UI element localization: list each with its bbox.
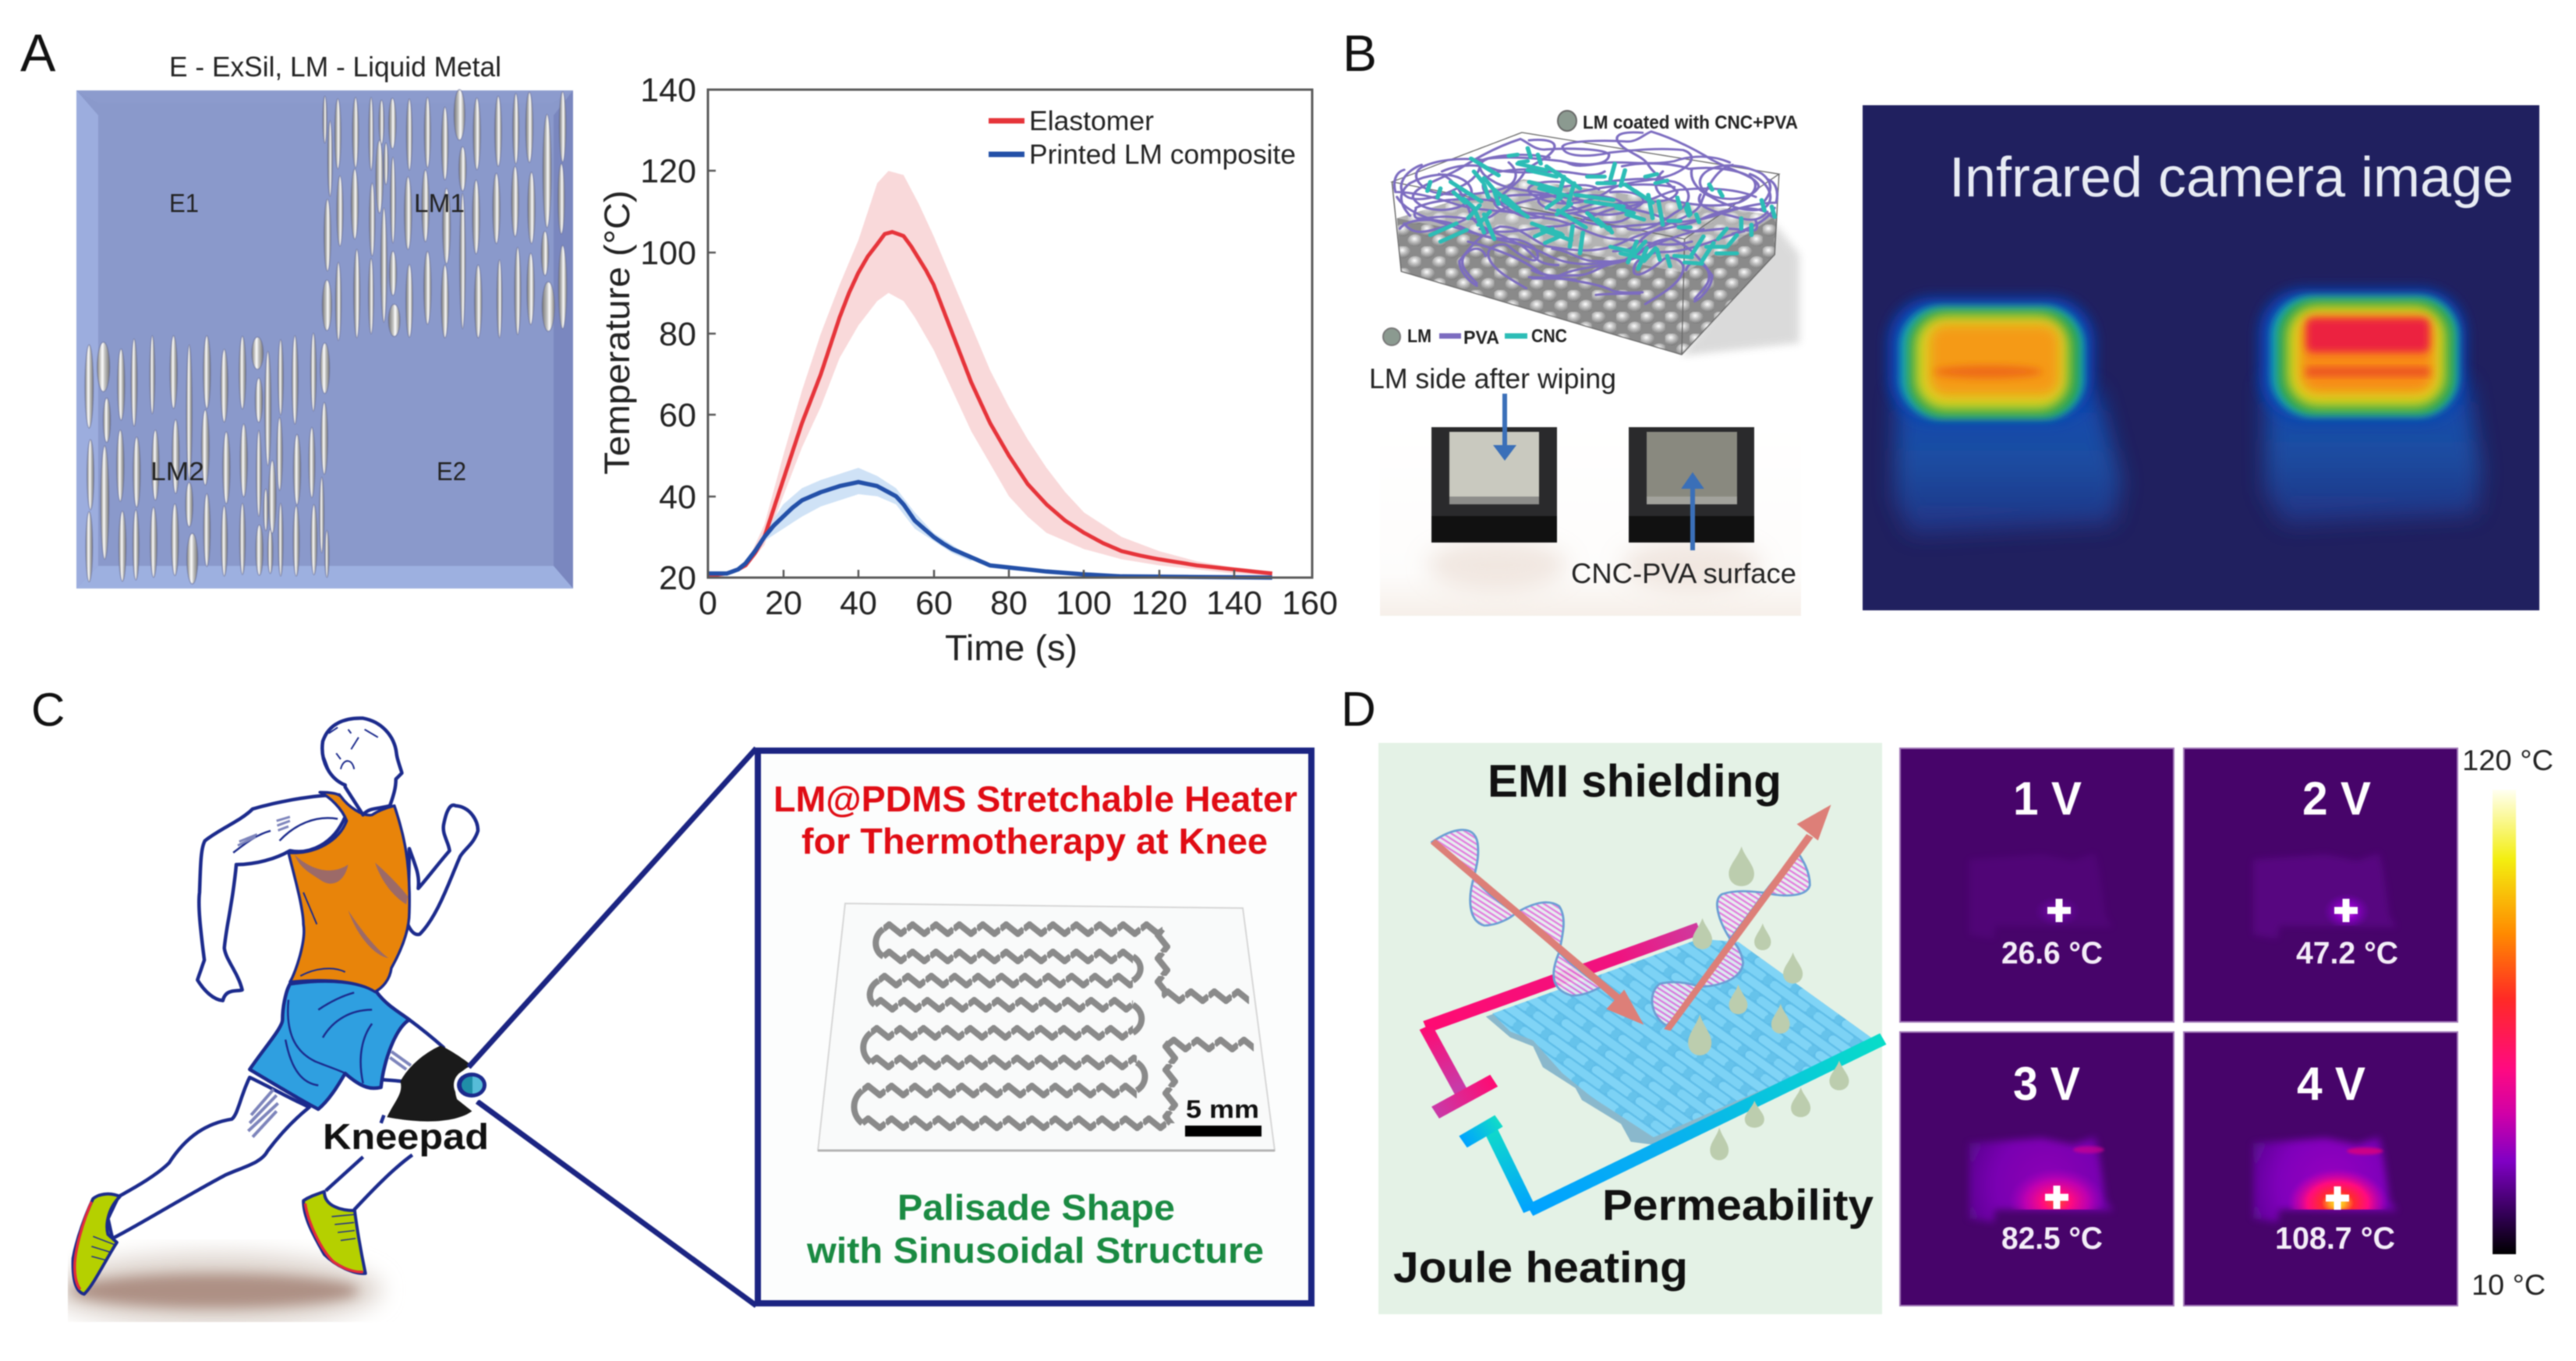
sample: CNC-PVA surface — [1629, 427, 1754, 543]
panel D: thermal image 4 V: 4 V — [2297, 1058, 2365, 1110]
EM waves — [1432, 830, 1810, 1026]
panel letter C: C — [31, 684, 65, 736]
panel letter B: B — [1343, 24, 1377, 82]
label: Joule heating: Joule heating — [1393, 1243, 1688, 1292]
left arm — [197, 795, 345, 1001]
LM2 liquid metal grains — [85, 333, 330, 584]
panel letter A: A — [20, 23, 56, 83]
panel D: thermal image 1 V: 1 V — [2013, 772, 2082, 825]
chart legend: Printed LM composite — [1029, 140, 1296, 170]
y axis numbers: 120 — [640, 153, 696, 190]
x axis numbers — [699, 585, 1338, 622]
panel D: thermal image 2 V: 47.2 °C — [2296, 936, 2398, 970]
panel C: heater callout box — [758, 751, 1311, 1303]
label LM1: LM1 — [414, 189, 465, 217]
material key: CNC — [1531, 326, 1567, 347]
heading: stretchable heater — [773, 779, 1297, 861]
material key — [1383, 326, 1567, 348]
y axis numbers: 140 — [640, 72, 696, 109]
photo: serpentine heater on glass — [818, 903, 1275, 1151]
panel D: thermal image 3 V — [1900, 1032, 2174, 1306]
head — [322, 718, 402, 815]
water droplets — [1688, 847, 1849, 1160]
panel A: temperature versus time line chart — [597, 72, 1338, 668]
right hot spot — [2259, 288, 2482, 524]
printed LM composite curve — [708, 482, 1272, 578]
x axis numbers: 0 — [699, 585, 717, 622]
red shaded band — [745, 171, 1272, 575]
heading: stretchable heater: LM@PDMS Stretchable Heater — [773, 779, 1297, 819]
icon: coated LM bead — [1558, 111, 1576, 131]
panel C: zoom callout lines — [469, 748, 756, 1306]
caption: palisade shape: with Sinusoidal Structure — [806, 1230, 1264, 1271]
scale bar: 5 mm — [1186, 1095, 1259, 1123]
thigh hatch — [248, 1052, 411, 1137]
panel D: thermal image 2 V — [2184, 748, 2457, 1022]
temperature colour bar — [2462, 744, 2553, 1301]
y axis numbers: 20 — [659, 560, 696, 597]
heading: stretchable heater: for Thermotherapy at Knee — [801, 821, 1268, 861]
icon: knee heater spot — [454, 1069, 490, 1101]
thigh — [381, 1020, 444, 1081]
heading: infrared camera image: Infrared camera image — [1949, 147, 2514, 209]
panel D: thermal image 4 V: 108.7 °C — [2275, 1221, 2395, 1256]
label: LM coated with CNC+PVA: LM coated with CNC+PVA — [1583, 112, 1798, 133]
panel D: EMI shielding schematic — [1378, 743, 1883, 1314]
panel B: infrared camera image — [1863, 105, 2539, 610]
label LM2: LM2 — [150, 457, 204, 486]
rear shoe — [73, 1194, 120, 1294]
panel A: material layout square — [76, 51, 573, 589]
x axis title: Time (s) — [945, 627, 1077, 668]
sample: LM side — [1431, 427, 1557, 543]
front shoe — [303, 1192, 366, 1274]
ground shadow — [47, 1253, 382, 1327]
x axis numbers: 40 — [840, 585, 877, 622]
panel letter D: D — [1341, 683, 1376, 737]
panel D: thermal image 2 V: 2 V — [2302, 772, 2371, 825]
x axis numbers: 80 — [990, 585, 1028, 622]
label: colour bar minimum: 10 °C — [2472, 1269, 2546, 1301]
x axis numbers: 20 — [765, 585, 802, 622]
y axis numbers: 60 — [659, 397, 696, 434]
caption: palisade shape: Palisade Shape — [897, 1187, 1175, 1228]
CNC teal rods — [1428, 148, 1775, 269]
heading: material legend: E - ExSil, LM - Liquid Metal — [169, 51, 501, 83]
y axis numbers: 100 — [640, 235, 696, 272]
label: kneepad: Kneepad — [323, 1116, 489, 1157]
woven textile — [1486, 939, 1875, 1145]
front lower leg — [326, 1119, 435, 1210]
y axis numbers: 40 — [659, 479, 696, 516]
rear leg — [108, 1077, 310, 1239]
x axis numbers: 60 — [915, 585, 953, 622]
elastomer curve — [708, 232, 1272, 575]
label: colour bar maximum: 120 °C — [2462, 744, 2553, 776]
x axis numbers: 120 — [1131, 585, 1187, 622]
x axis numbers: 140 — [1206, 585, 1262, 622]
arrow: to LM side — [1498, 394, 1512, 457]
arrow: incident wave — [1431, 839, 1644, 1025]
right arm — [408, 805, 478, 935]
PVA purple chains — [1394, 132, 1777, 304]
caption: palisade shape — [806, 1187, 1264, 1271]
material key: LM — [1407, 326, 1431, 347]
shorts — [249, 981, 409, 1109]
panel B: sample photographs — [1369, 362, 1801, 616]
arrow: reflected wave — [1664, 804, 1831, 1030]
y axis title: Temperature (°C) — [597, 190, 637, 475]
kneepad — [387, 1045, 472, 1122]
panel D: thermal image 1 V — [1900, 748, 2174, 1022]
panel D: thermal image 4 V — [2184, 1032, 2457, 1306]
panel C: runner illustration — [47, 718, 478, 1327]
label E2: E2 — [437, 457, 466, 486]
chart legend — [989, 106, 1296, 170]
label: LM side after wiping: LM side after wiping — [1369, 362, 1616, 394]
orange tank top — [288, 792, 409, 992]
runner figure — [73, 718, 478, 1294]
box with beads and fibers — [1392, 132, 1799, 356]
material key: PVA — [1463, 327, 1499, 348]
y axis numbers: 80 — [659, 316, 696, 353]
pink electrode — [1425, 928, 1699, 1112]
label: EMI shielding: EMI shielding — [1488, 756, 1782, 807]
x axis numbers: 100 — [1056, 585, 1112, 622]
label E1: E1 — [169, 189, 199, 217]
blue shaded band — [764, 468, 971, 561]
panel D: thermal image 3 V: 3 V — [2013, 1058, 2080, 1110]
panel D: thermal image 3 V: 82.5 °C — [2001, 1221, 2103, 1256]
x axis numbers: 160 — [1282, 585, 1338, 622]
y axis numbers — [640, 72, 696, 597]
chart legend: Elastomer — [1029, 106, 1154, 136]
panel D: thermal image 1 V: 26.6 °C — [2001, 936, 2103, 970]
blue electrode — [1463, 1039, 1883, 1211]
left hot spot — [1888, 297, 2122, 534]
scale bar — [1185, 1095, 1261, 1137]
panel B: 3D composite schematic — [1383, 111, 1799, 356]
label: permeability: Permeability — [1602, 1180, 1874, 1229]
arrow: to CNC-PVA surface — [1686, 476, 1700, 550]
label: CNC-PVA surface: CNC-PVA surface — [1571, 557, 1796, 589]
LM1 liquid metal grains — [322, 90, 567, 341]
